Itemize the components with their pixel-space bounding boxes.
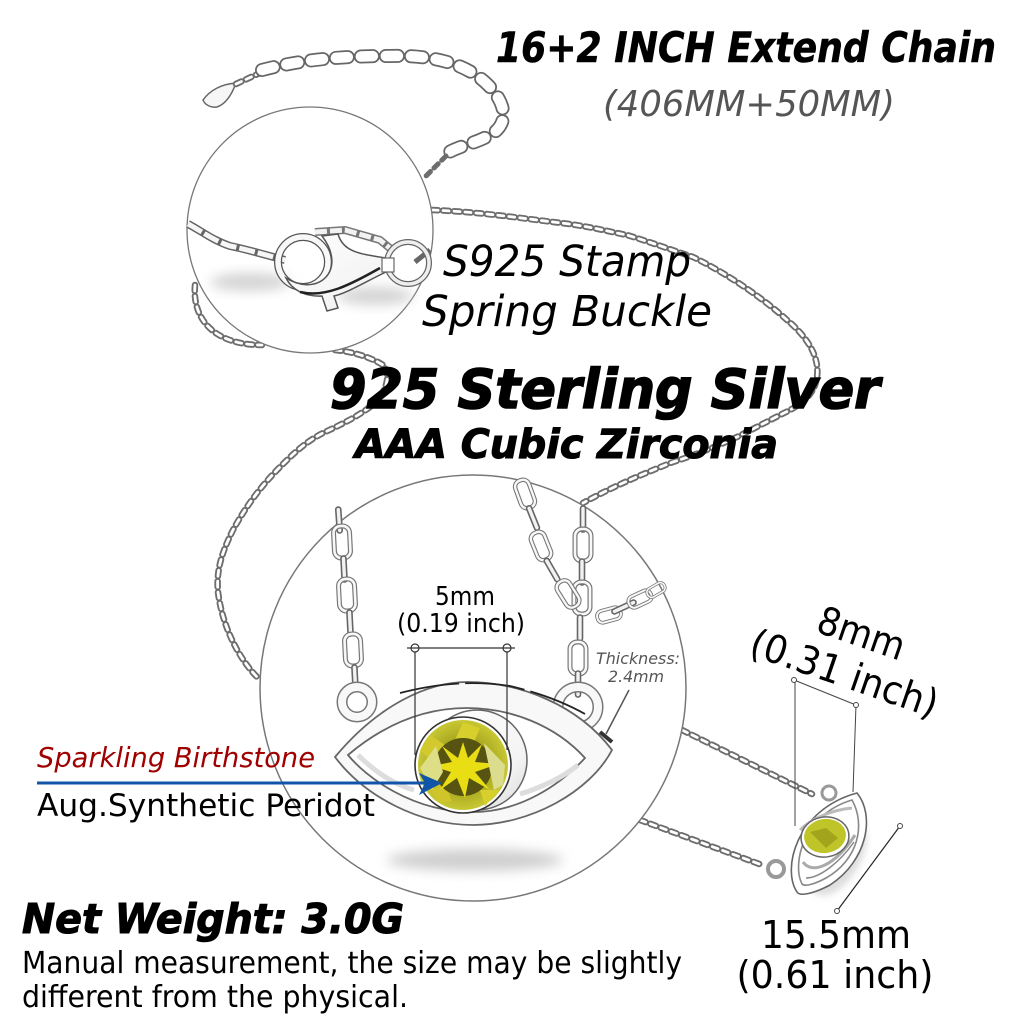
- title: chain length: [496, 23, 996, 125]
- spring ring: [278, 237, 328, 287]
- clasp shadow: [210, 273, 413, 305]
- eye frame: [335, 682, 612, 825]
- birthstone callout with arrow: Aug.Synthetic Peridot: [37, 788, 375, 824]
- small pendant view: [768, 786, 878, 905]
- thickness label: Thickness:: [596, 649, 680, 668]
- material heading: 925 Sterling Silver: [330, 358, 883, 421]
- small pendant width dimension: 8mm: [811, 598, 911, 670]
- frame dark top edge: [400, 683, 585, 714]
- bezel: [427, 710, 527, 810]
- extender chain with tag: [203, 56, 503, 178]
- clasp label: S925 Stamp: [443, 237, 691, 287]
- material heading: AAA Cubic Zirconia: [352, 422, 778, 468]
- panel: pendant detail circle: [260, 475, 686, 901]
- frame back rails: [358, 755, 578, 794]
- small pendant length dimension: 15.5mm: [761, 913, 911, 957]
- small gem: [798, 814, 852, 860]
- clasp chain: [188, 224, 430, 262]
- pendant loops: [342, 687, 598, 727]
- birthstone callout with arrow: [37, 741, 442, 824]
- small pendant length dimension: (0.61 inch): [736, 953, 934, 997]
- measurement note: different from the physical.: [22, 980, 408, 1015]
- panel: clasp detail circle: [187, 107, 433, 353]
- gem width dimension: [397, 582, 525, 755]
- end ring: [387, 242, 429, 284]
- net weight: Net Weight: 3.0G: [22, 895, 404, 943]
- lobster clasp body: [286, 234, 386, 311]
- small pendant width dimension: [744, 598, 944, 826]
- material heading: [330, 358, 883, 468]
- gem: peridot: [418, 720, 508, 810]
- left chain: [333, 507, 362, 691]
- small pendant width dimension: (0.31 inch): [744, 621, 944, 727]
- clasp label: Spring Buckle: [422, 287, 712, 337]
- main necklace chain: [195, 210, 817, 865]
- small pendant shadow: [798, 811, 878, 905]
- thickness label: 2.4mm: [608, 667, 664, 686]
- pendant shadow: [387, 849, 563, 871]
- thickness label: [596, 649, 680, 686]
- right chain: [570, 506, 591, 697]
- birthstone callout with arrow: Sparkling Birthstone: [37, 741, 315, 774]
- gem width dimension: (0.19 inch): [397, 609, 525, 639]
- back chain: [513, 478, 667, 624]
- measurement note: Manual measurement, the size may be slightly: [22, 946, 682, 981]
- clasp label: [422, 237, 712, 337]
- gem width dimension: 5mm: [435, 582, 495, 612]
- small eye frame: [791, 793, 866, 894]
- small pendant length dimension: [736, 824, 934, 997]
- measurement note: [22, 946, 682, 1015]
- thickness pointer: [606, 690, 629, 734]
- title: chain length: (406MM+50MM): [603, 84, 895, 125]
- small pendant loops: [768, 786, 836, 877]
